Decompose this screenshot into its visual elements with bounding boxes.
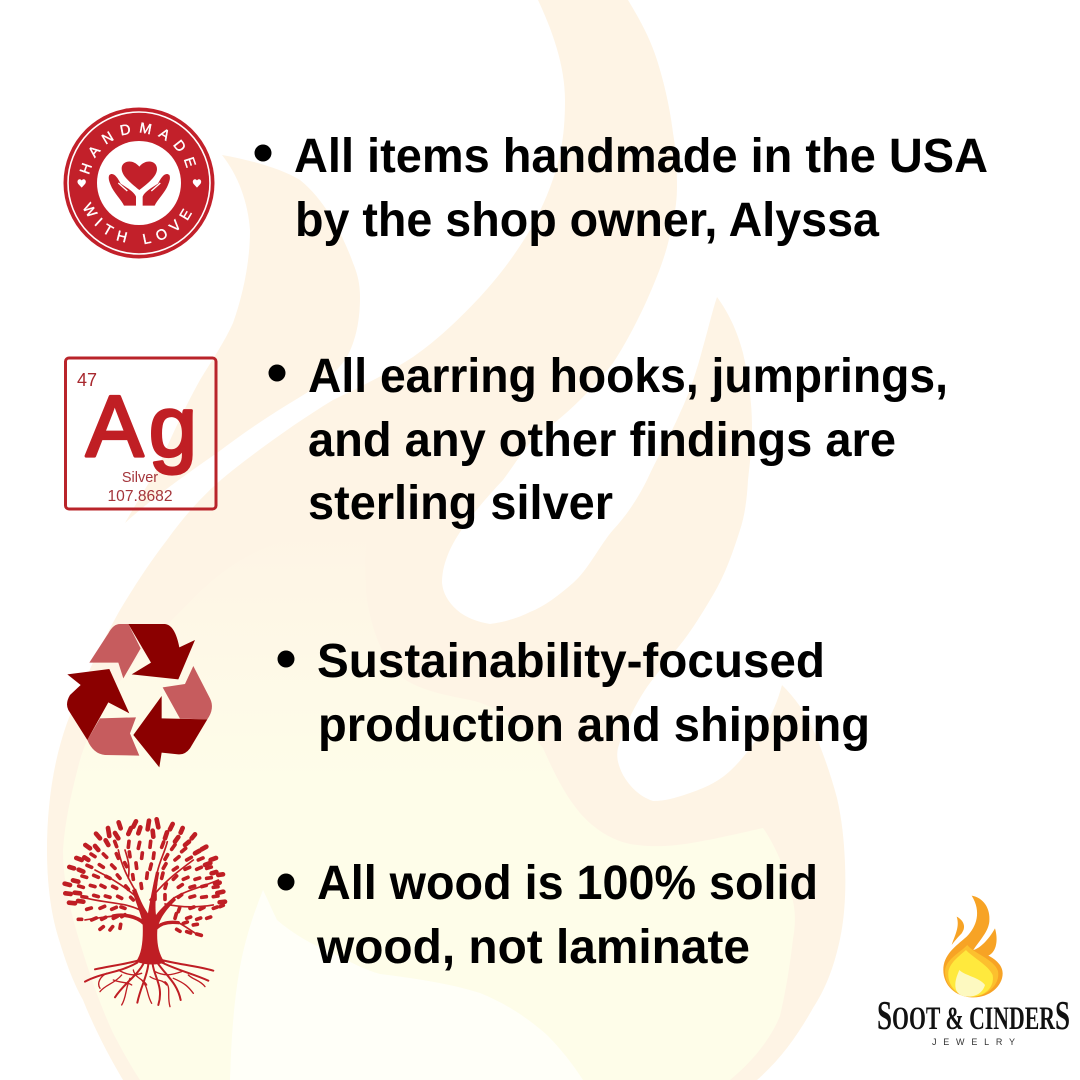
text block: sterling silver findings: All earring hooks, jumprings, bbox=[308, 350, 948, 403]
icon: silver periodic table tile bbox=[66, 358, 216, 509]
text block: handmade in the USA: All items handmade in the USA bbox=[294, 130, 988, 183]
text block: handmade in the USA bbox=[254, 130, 988, 247]
text block: sustainability: Sustainability-focused bbox=[317, 635, 825, 688]
text block: solid wood: wood, not laminate bbox=[316, 921, 750, 974]
icon: tree with roots bbox=[65, 819, 225, 1007]
icon: handmade with love badge bbox=[64, 108, 214, 258]
icon: logo flame bbox=[943, 896, 1003, 997]
icon: handmade with love badge: WITH LOVE bbox=[83, 202, 192, 244]
icon: silver periodic table tile: A bbox=[86, 379, 144, 475]
text block: solid wood: All wood is 100% solid bbox=[317, 857, 818, 910]
icon: silver periodic table tile: g bbox=[149, 379, 197, 475]
icon: silver periodic table tile: 47 bbox=[77, 370, 97, 390]
icon: handmade with love badge: HANDMADE bbox=[80, 122, 196, 174]
icon: silver periodic table tile: Silver bbox=[122, 470, 158, 486]
icon: silver periodic table tile: 107.8682 bbox=[107, 488, 173, 505]
text block: sterling silver findings: and any other findings are bbox=[308, 414, 896, 467]
text block: solid wood bbox=[278, 857, 818, 974]
text block: sustainability bbox=[278, 635, 870, 752]
text block: sustainability: production and shipping bbox=[318, 699, 870, 752]
icon: recycling arrows bbox=[67, 624, 212, 767]
text block: handmade in the USA: by the shop owner, Alyssa bbox=[295, 194, 879, 247]
text block: sterling silver findings: sterling silver bbox=[308, 477, 613, 530]
logo: Soot and Cinders Jewelry bbox=[877, 896, 1070, 1047]
text block: sterling silver findings bbox=[268, 350, 948, 530]
background flame watermark bbox=[47, 0, 845, 1080]
logo tagline: JEWELRY bbox=[932, 1037, 1015, 1047]
